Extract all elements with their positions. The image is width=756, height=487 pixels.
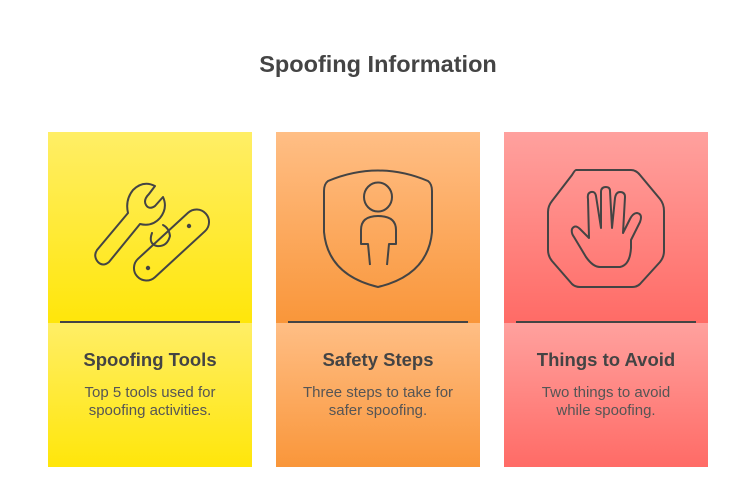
text: avoid description [542,384,670,419]
icon: wrench and knife [94,182,210,282]
heading: things to avoid: Things to Avoid [537,349,675,370]
text: avoid description: Two things to avoid [542,384,670,401]
heading: safety steps: Safety Steps [322,349,434,370]
icon: shield with person [323,170,433,288]
text: safety description: Three steps to take for [303,384,453,401]
heading: spoofing tools: Spoofing Tools [83,349,217,370]
text: tools description [84,384,216,419]
text: safety description [303,384,453,419]
text: tools description: Top 5 tools used for [85,384,215,401]
panel: things to avoid [504,132,708,467]
title: Spoofing Information [259,51,497,77]
text: avoid description: while spoofing. [556,402,656,419]
panel: spoofing tools [48,132,252,467]
panel: safety steps [276,132,480,467]
text: safety description: safer spoofing. [329,402,427,419]
text: tools description: spoofing activities. [89,402,211,419]
icon: stop hand [547,169,665,288]
